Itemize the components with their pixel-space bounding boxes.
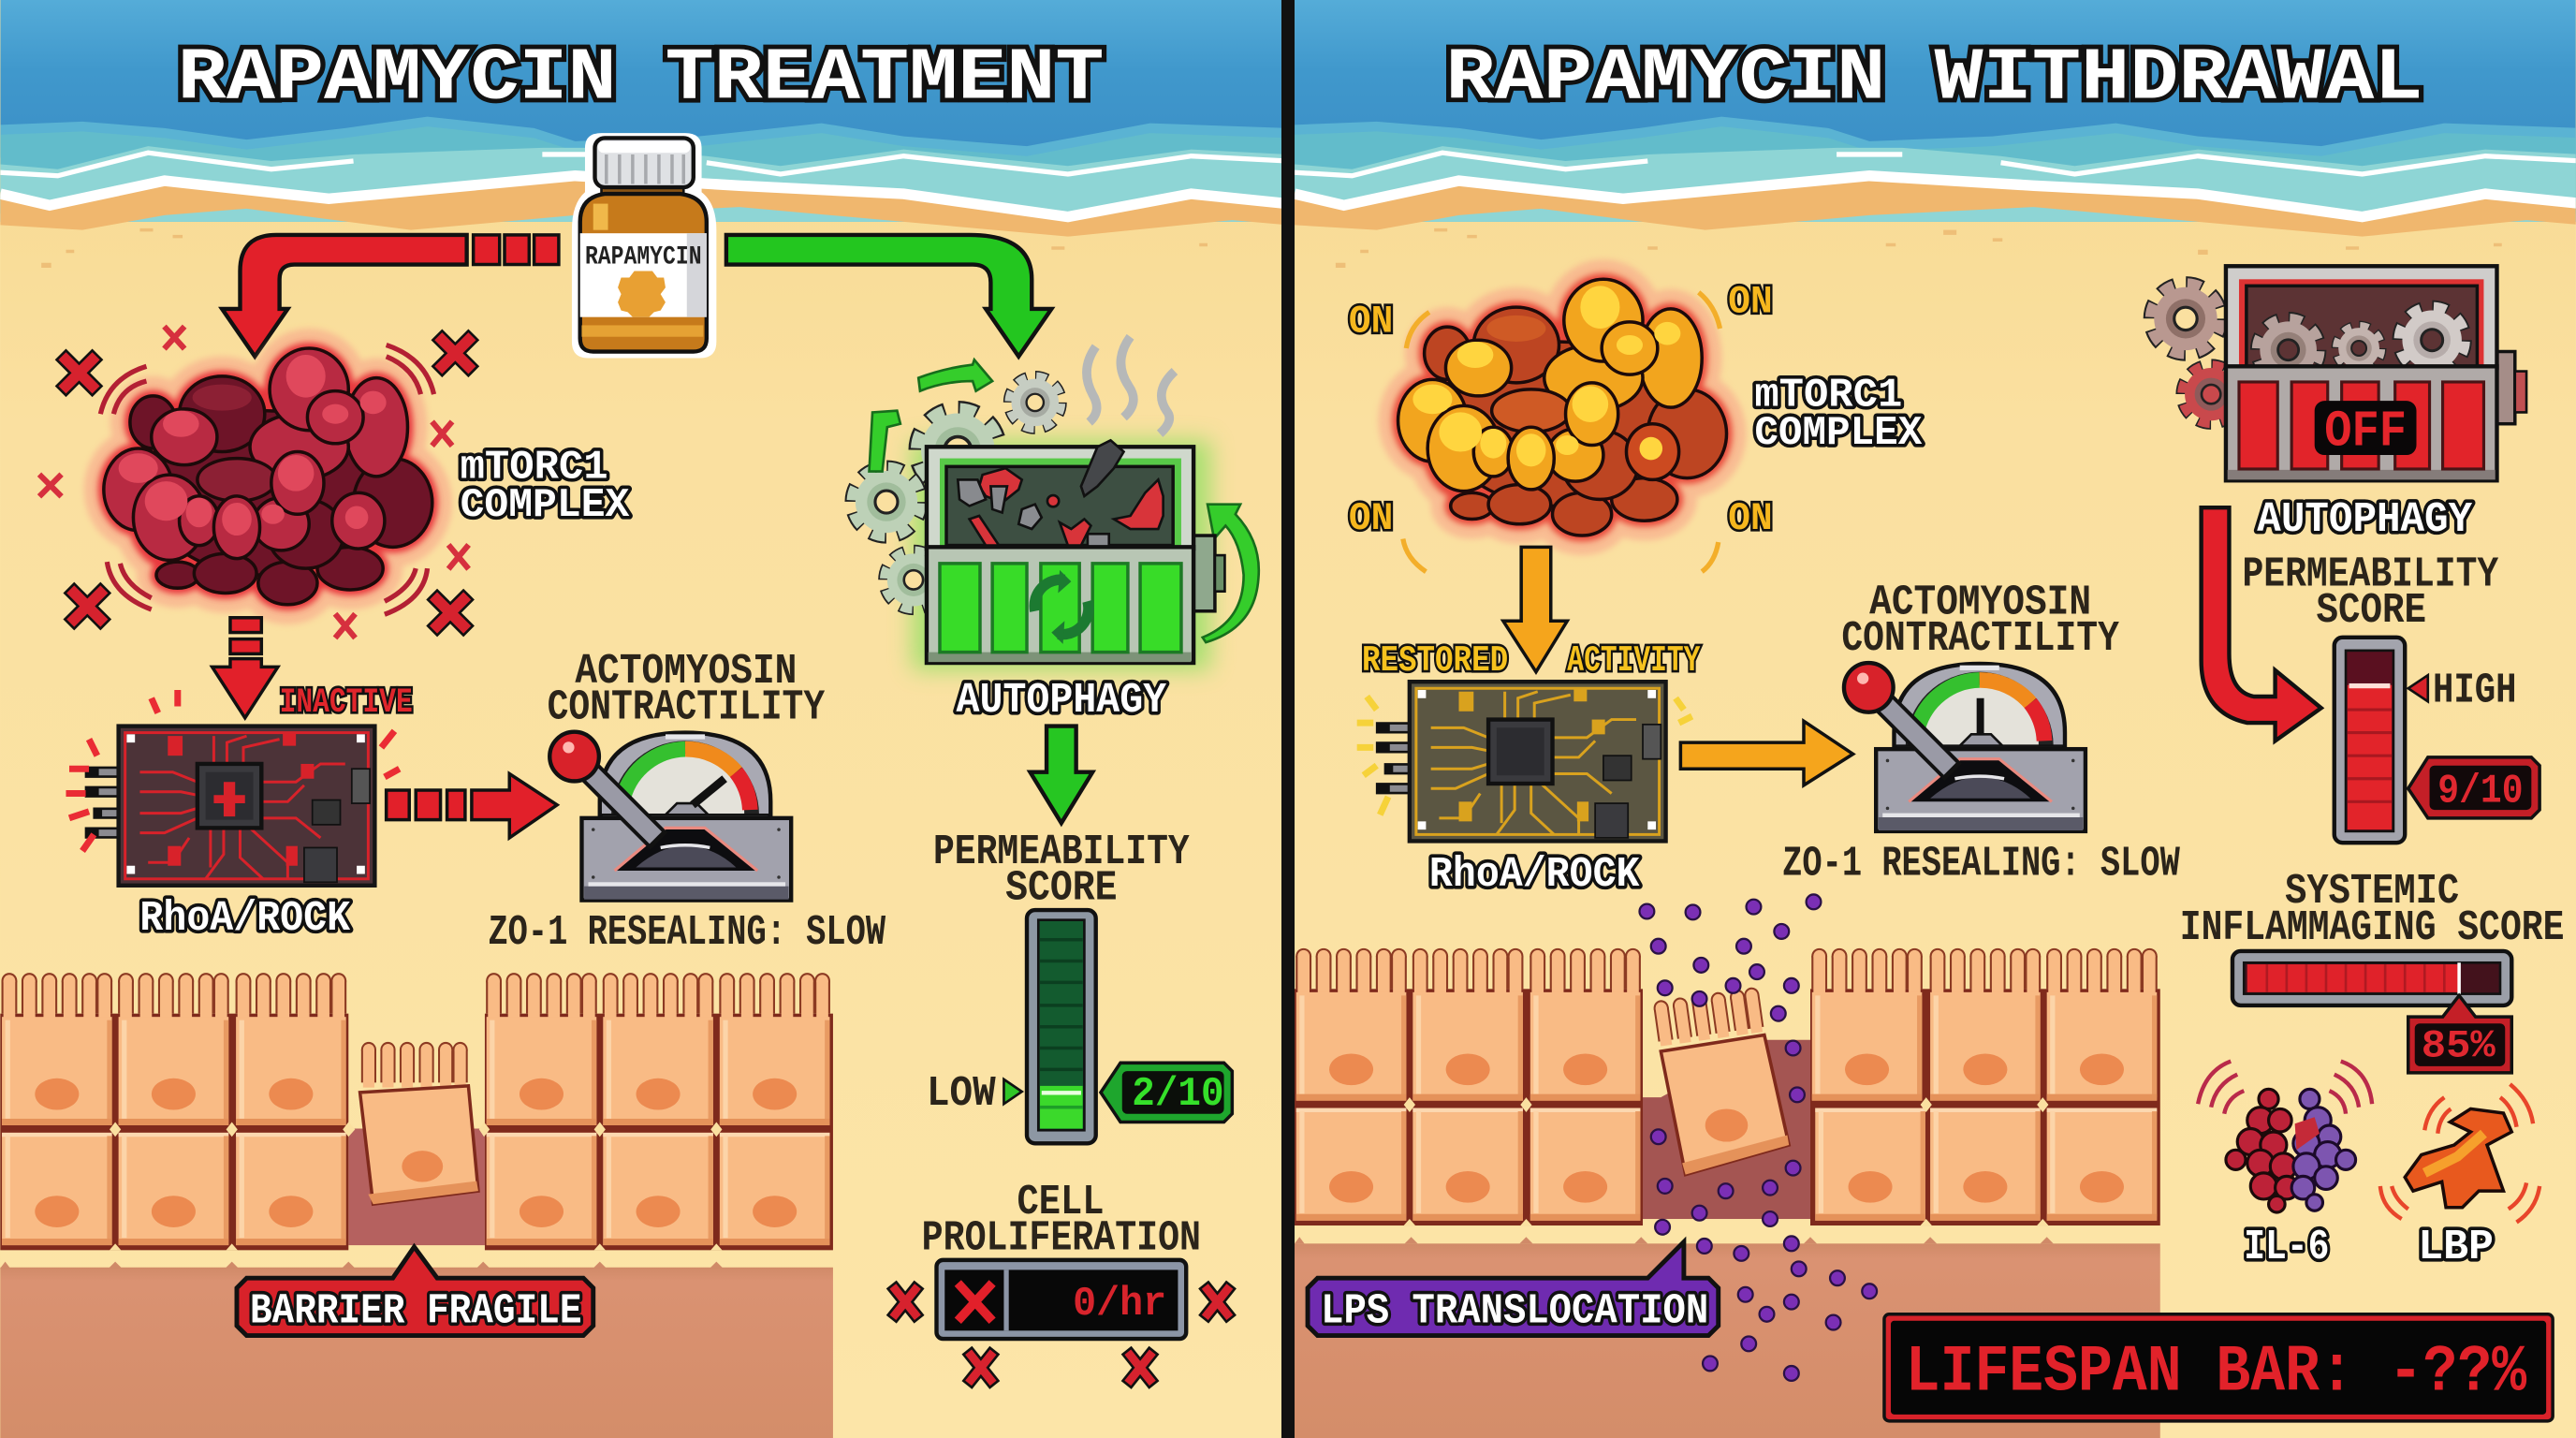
gauge: actomyosin contractility right	[1844, 663, 2086, 831]
stalled outer gears	[2152, 286, 2219, 352]
recycling arrows	[870, 360, 1259, 642]
label: cell proliferation	[922, 1178, 1201, 1262]
crosses around display	[896, 1289, 1227, 1380]
label: mTORC1 complex right: COMPLEX	[1754, 410, 1923, 457]
value badge 2/10	[1101, 1063, 1232, 1122]
label: permeability score left: SCORE	[1005, 864, 1118, 913]
panel: rapamycin withdrawal	[1295, 0, 2576, 311]
arrow: red from autophagy to permeability	[2202, 507, 2321, 741]
callout: barrier fragile: BARRIER FRAGILE	[250, 1287, 581, 1336]
label: mTORC1 complex: COMPLEX	[461, 482, 630, 529]
lifted dislodged cell	[1653, 987, 1789, 1175]
title: rapamycin treatment: RAPAMYCIN TREATMENT	[178, 36, 1104, 120]
orange arcs	[1403, 292, 1720, 572]
callout: LPS translocation: LPS TRANSLOCATION	[1321, 1287, 1708, 1336]
arrow: red inhibition to mTORC1	[222, 235, 559, 357]
panel: intestinal barrier left	[0, 973, 833, 1438]
label: actomyosin contractility right: CONTRACTILITY	[1841, 614, 2119, 663]
label: mTORC1 complex	[461, 445, 630, 529]
gauge: permeability bar high	[2334, 638, 2539, 843]
high marker	[2408, 666, 2517, 714]
label: restored activity	[1362, 640, 1701, 682]
value badge 9/10	[2408, 757, 2539, 818]
inhibition crosses	[41, 329, 468, 636]
label: systemic inflammaging score	[2180, 867, 2564, 952]
gauge: inflammaging bar 85%	[2232, 951, 2511, 1073]
label: ON indicators: ON	[1728, 279, 1773, 324]
value badge 85%: 85%	[2422, 1023, 2496, 1068]
label: IL-6: IL-6	[2244, 1223, 2329, 1271]
off sign: OFF	[2324, 404, 2407, 462]
icon: active autophagy machine	[854, 337, 1259, 670]
label: permeability score left: PERMEABILITY	[933, 828, 1190, 876]
label: mTORC1 complex right: mTORC1	[1754, 372, 1902, 418]
icon: inactive mTORC1 complex	[41, 329, 468, 636]
label: permeability score right: SCORE	[2316, 586, 2426, 635]
label: systemic inflammaging score: SYSTEMIC	[2285, 867, 2459, 916]
arrow: orange down to RhoA/ROCK	[1503, 547, 1567, 672]
arrow: green activation to autophagy	[726, 235, 1051, 357]
icon: active mTORC1 complex	[1398, 279, 1727, 572]
panel: intestinal barrier right	[1295, 948, 2160, 1438]
gauge: actomyosin contractility left	[549, 732, 791, 901]
purple LPS particles	[1640, 894, 1877, 1381]
label: ON indicators: ON	[1349, 299, 1393, 344]
label: restored activity: RESTORED	[1362, 640, 1508, 682]
gears	[854, 377, 1061, 608]
red sparks	[66, 690, 400, 851]
label: permeability score right	[2242, 550, 2499, 635]
callout: lifespan bar	[1884, 1314, 2553, 1421]
label: actomyosin contractility right	[1841, 578, 2119, 663]
cellular debris	[958, 440, 1164, 547]
title: rapamycin withdrawal: RAPAMYCIN WITHDRAWAL	[1445, 36, 2423, 120]
value badge 2/10: 2/10	[1132, 1071, 1224, 1118]
label: actomyosin contractility right: ACTOMYOSIN	[1869, 578, 2091, 626]
callout: barrier fragile	[237, 1247, 593, 1336]
panel: rapamycin treatment	[0, 0, 1281, 311]
display: proliferation rate 0/hr: 0/hr	[1073, 1281, 1166, 1328]
label: restored activity: ACTIVITY	[1567, 640, 1701, 682]
stalled inner gears	[2258, 320, 2319, 380]
low marker: LOW	[927, 1069, 996, 1118]
label: ZO-1 resealing left: ZO-1 RESEALING: SLOW	[488, 908, 886, 957]
label: RhoA/ROCK right: RhoA/ROCK	[1429, 850, 1640, 899]
label: inactive: INACTIVE	[280, 683, 413, 723]
label: ON indicators: ON	[1349, 496, 1393, 541]
high marker: HIGH	[2433, 666, 2517, 714]
label: actomyosin contractility left	[548, 647, 826, 732]
arrow: dashed red to gauge	[387, 773, 557, 838]
icon: active RhoA/ROCK circuit board	[1357, 682, 1692, 841]
value badge 9/10: 9/10	[2437, 768, 2524, 814]
label: permeability score left	[933, 828, 1190, 913]
value badge 85%	[2408, 995, 2511, 1073]
ocean and beach waves right	[1295, 0, 2576, 268]
bottle label text: RAPAMYCIN	[585, 243, 702, 272]
label: permeability score right: PERMEABILITY	[2242, 550, 2499, 599]
label: actomyosin contractility left: CONTRACTILITY	[548, 683, 826, 732]
label: ZO-1 resealing right: ZO-1 RESEALING: SLOW	[1782, 839, 2180, 888]
signal arcs	[2198, 1062, 2372, 1114]
ocean and beach waves	[0, 0, 1288, 268]
gauge: permeability bar low	[927, 910, 1232, 1143]
label: actomyosin contractility left: ACTOMYOSIN	[575, 647, 797, 696]
label: mTORC1 complex right	[1754, 372, 1923, 457]
icon: rapamycin bottle	[572, 133, 716, 359]
label: cell proliferation: PROLIFERATION	[922, 1213, 1201, 1262]
display: proliferation rate 0/hr	[896, 1260, 1227, 1380]
label: ON indicators: ON	[1728, 496, 1773, 541]
arrow: orange to gauge	[1680, 721, 1853, 785]
icon: inactive RhoA/ROCK circuit board	[66, 690, 400, 886]
steam	[1087, 337, 1175, 433]
label: RhoA/ROCK: RhoA/ROCK	[139, 894, 351, 943]
label: mTORC1 complex: mTORC1	[461, 445, 608, 492]
recycle symbol	[1034, 580, 1089, 635]
lifted cell	[360, 1042, 478, 1204]
callout: LPS translocation	[1308, 1242, 1719, 1336]
arrow: dashed red down to RhoA/ROCK	[212, 618, 278, 718]
arrow: green down to permeability	[1031, 726, 1092, 823]
label: ON indicators	[1349, 279, 1773, 541]
label: autophagy right: AUTOPHAGY	[2257, 495, 2473, 544]
label: cell proliferation: CELL	[1017, 1178, 1104, 1226]
label: autophagy left: AUTOPHAGY	[957, 676, 1167, 725]
icon: IL-6 molecule	[2198, 1062, 2372, 1212]
yellow sparks	[1357, 697, 1692, 814]
label: LBP: LBP	[2418, 1223, 2494, 1271]
icon: autophagy machine off	[2152, 266, 2526, 480]
vibration arcs	[100, 345, 434, 614]
icon: LBP molecule	[2380, 1084, 2539, 1223]
center divider	[1281, 0, 1295, 1438]
signal arcs	[2380, 1084, 2539, 1223]
